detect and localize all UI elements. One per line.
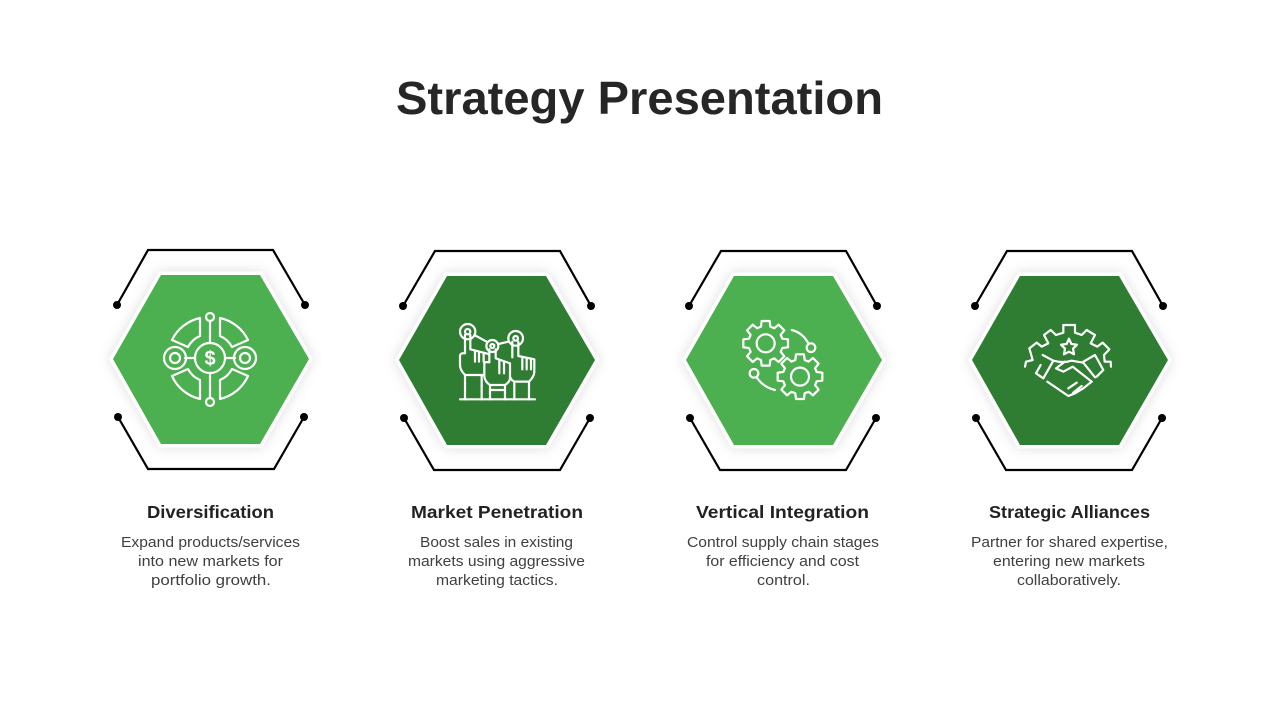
description: markets using aggressive bbox=[408, 554, 585, 570]
bracket: top bbox=[971, 251, 1167, 310]
bracket: bottom bbox=[114, 413, 308, 469]
description bbox=[687, 535, 879, 589]
icon: gears bbox=[743, 321, 822, 399]
panel: Strategic Alliances bbox=[971, 251, 1168, 589]
hexagon bbox=[113, 275, 309, 444]
heading: Strategic Alliances bbox=[989, 502, 1150, 522]
description: collaboratively. bbox=[1017, 573, 1121, 589]
icon: hands and chart bbox=[460, 324, 535, 399]
description: control. bbox=[757, 573, 810, 589]
description: for efficiency and cost bbox=[706, 554, 859, 570]
description: entering new markets bbox=[993, 554, 1145, 570]
panel: Vertical Integration bbox=[685, 251, 882, 589]
bracket: bottom bbox=[686, 414, 880, 470]
panel: Diversification bbox=[113, 250, 309, 589]
bracket: top bbox=[399, 251, 595, 310]
icon: dollar target bbox=[164, 313, 256, 406]
description: Control supply chain stages bbox=[687, 535, 879, 551]
hexagon bbox=[399, 276, 595, 445]
panel: Market Penetration bbox=[399, 251, 595, 589]
description bbox=[408, 535, 585, 589]
description: into new markets for bbox=[138, 554, 283, 570]
description: Boost sales in existing bbox=[420, 535, 573, 551]
title: Strategy Presentation bbox=[396, 72, 883, 124]
bracket: bottom bbox=[400, 414, 594, 470]
bracket: top bbox=[113, 250, 309, 309]
heading: Market Penetration bbox=[411, 502, 583, 522]
hexagon bbox=[686, 276, 882, 445]
description: Expand products/services bbox=[121, 535, 300, 551]
description bbox=[971, 535, 1168, 589]
description: portfolio growth. bbox=[151, 573, 271, 589]
icon: dollar target: $ bbox=[204, 348, 216, 370]
description: marketing tactics. bbox=[436, 573, 558, 589]
bracket: top bbox=[685, 251, 881, 310]
description: Partner for shared expertise, bbox=[971, 535, 1168, 551]
icon: handshake with gear and star bbox=[1025, 325, 1111, 396]
heading: Vertical Integration bbox=[696, 502, 869, 522]
hexagon bbox=[972, 276, 1168, 445]
heading: Diversification bbox=[147, 502, 274, 522]
bracket: bottom bbox=[972, 414, 1166, 470]
description bbox=[121, 535, 300, 589]
